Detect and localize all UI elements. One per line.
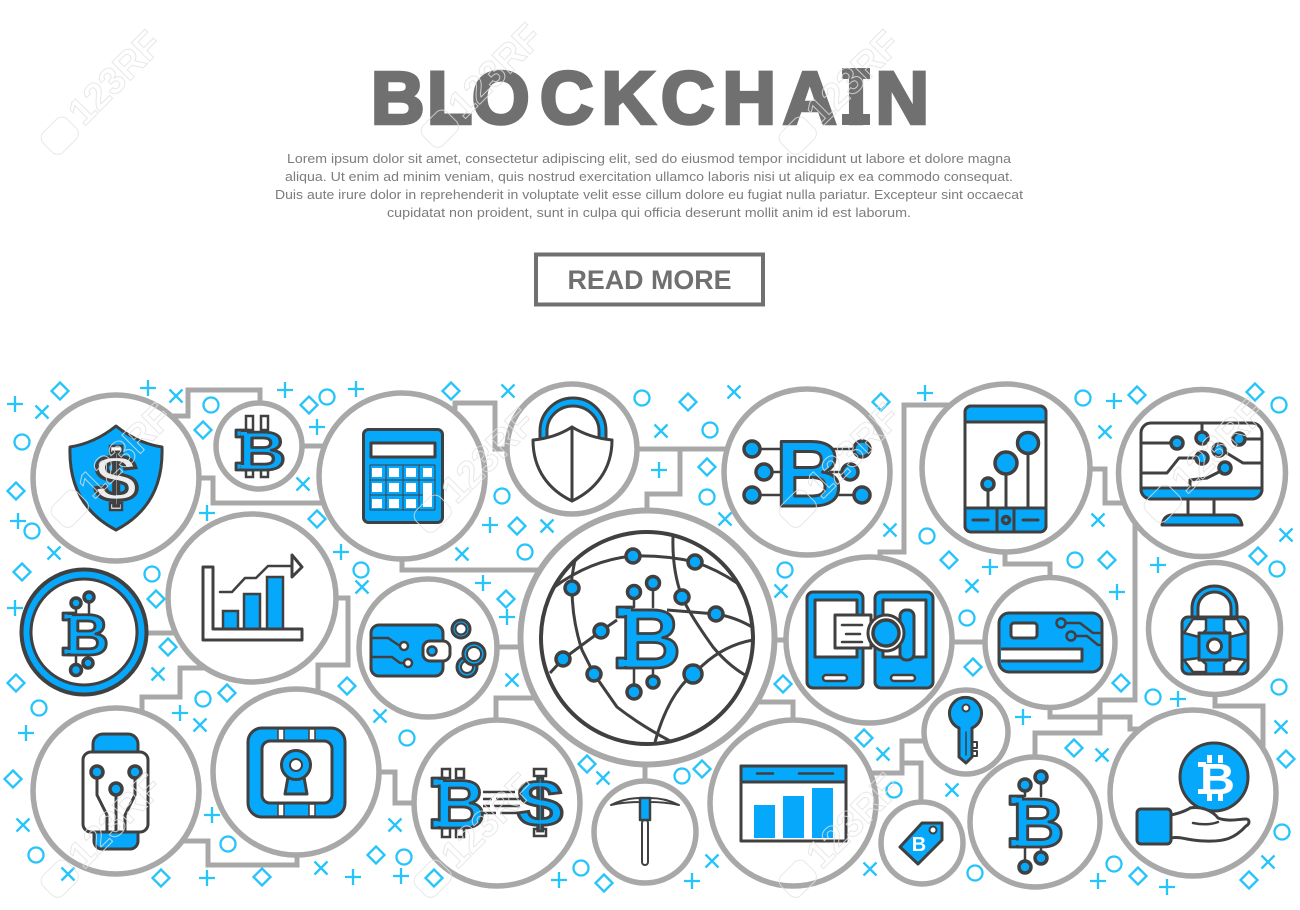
panel: price tag: B [912, 834, 926, 856]
panel: smartwatch circuit [33, 708, 199, 874]
watermark marks: 123RF [798, 396, 909, 507]
panel: padlock [1148, 562, 1280, 694]
panel: price tag [881, 802, 963, 884]
description text: Lorem ipsum dolor sit amet, consectetur adipiscing elit, sed do eiusmod tempor incididunt ut labore et dolore magna [287, 151, 1012, 166]
panel: browser bar chart [710, 720, 876, 886]
panel: global blockchain network: B [620, 592, 681, 686]
panel: bitcoin to dollar: B [434, 766, 486, 843]
panel: monitor circuit [1118, 390, 1286, 556]
panel: credit card circuit [985, 578, 1115, 708]
description text: aliqua. Ut enim ad minim veniam, quis nostrud exercitation ullamco laboris nisi ut aliquip ex ea commodo consequat. [285, 169, 1013, 184]
description text [275, 151, 1023, 220]
watermark marks: 123RF [798, 766, 909, 877]
panel: key [924, 690, 1008, 774]
description text: cupidatat non proident, sunt in culpa qui officia deserunt mollit anim id est laborum. [387, 205, 911, 220]
watermark marks: 123RF [440, 16, 551, 127]
panel: hand holding bitcoin: B [1200, 755, 1235, 804]
read more button [536, 254, 763, 304]
panel: wallet with coins [359, 579, 497, 717]
panel: bitcoin to dollar: $ [517, 766, 563, 840]
description text: Duis aute irure dolor in reprehenderit in voluptate velit esse cillum dolore eu fugiat nulla pariatur. Excepteur sint occaecat [275, 187, 1023, 202]
panel: shield padlock [507, 384, 637, 514]
title: BLOCKCHAIN [371, 56, 929, 140]
decorative scattered cyan symbols [4, 380, 1294, 895]
panel: bitcoin coin: B [65, 603, 109, 668]
read more button: READ MORE [568, 265, 732, 295]
panel: bitcoin coin [22, 570, 146, 694]
connector lines network [142, 390, 1263, 865]
watermark marks: 123RF [433, 766, 544, 877]
panel: smartphone signal [922, 384, 1090, 552]
panel: dollar shield [33, 395, 199, 561]
panel: keyhole safe [213, 689, 379, 855]
panel: dollar shield: $ [94, 441, 138, 515]
panel: bitcoin nodes [724, 389, 890, 555]
panel: pickaxe [594, 781, 696, 883]
panel: hand holding bitcoin [1110, 710, 1276, 876]
panel: small bitcoin [216, 403, 302, 489]
panel: growth chart [168, 514, 336, 682]
panel: bitcoin circuit [970, 757, 1100, 887]
watermark marks: 123RF [70, 396, 181, 507]
panel: global blockchain network [520, 510, 774, 764]
watermark marks: 123RF [60, 766, 171, 877]
watermark marks: 123RF [60, 23, 171, 134]
panel: phones exchange [786, 557, 952, 723]
panel: small bitcoin: B [238, 420, 286, 482]
panel: bitcoin circuit: B [1012, 784, 1064, 862]
panel: calculator [319, 393, 485, 559]
panel: bitcoin to dollar [414, 720, 580, 886]
watermark marks: 123RF [1163, 391, 1274, 502]
panel: bitcoin nodes: B [775, 421, 843, 526]
watermark marks: 123RF [798, 23, 909, 134]
watermark marks: 123RF [433, 401, 544, 512]
